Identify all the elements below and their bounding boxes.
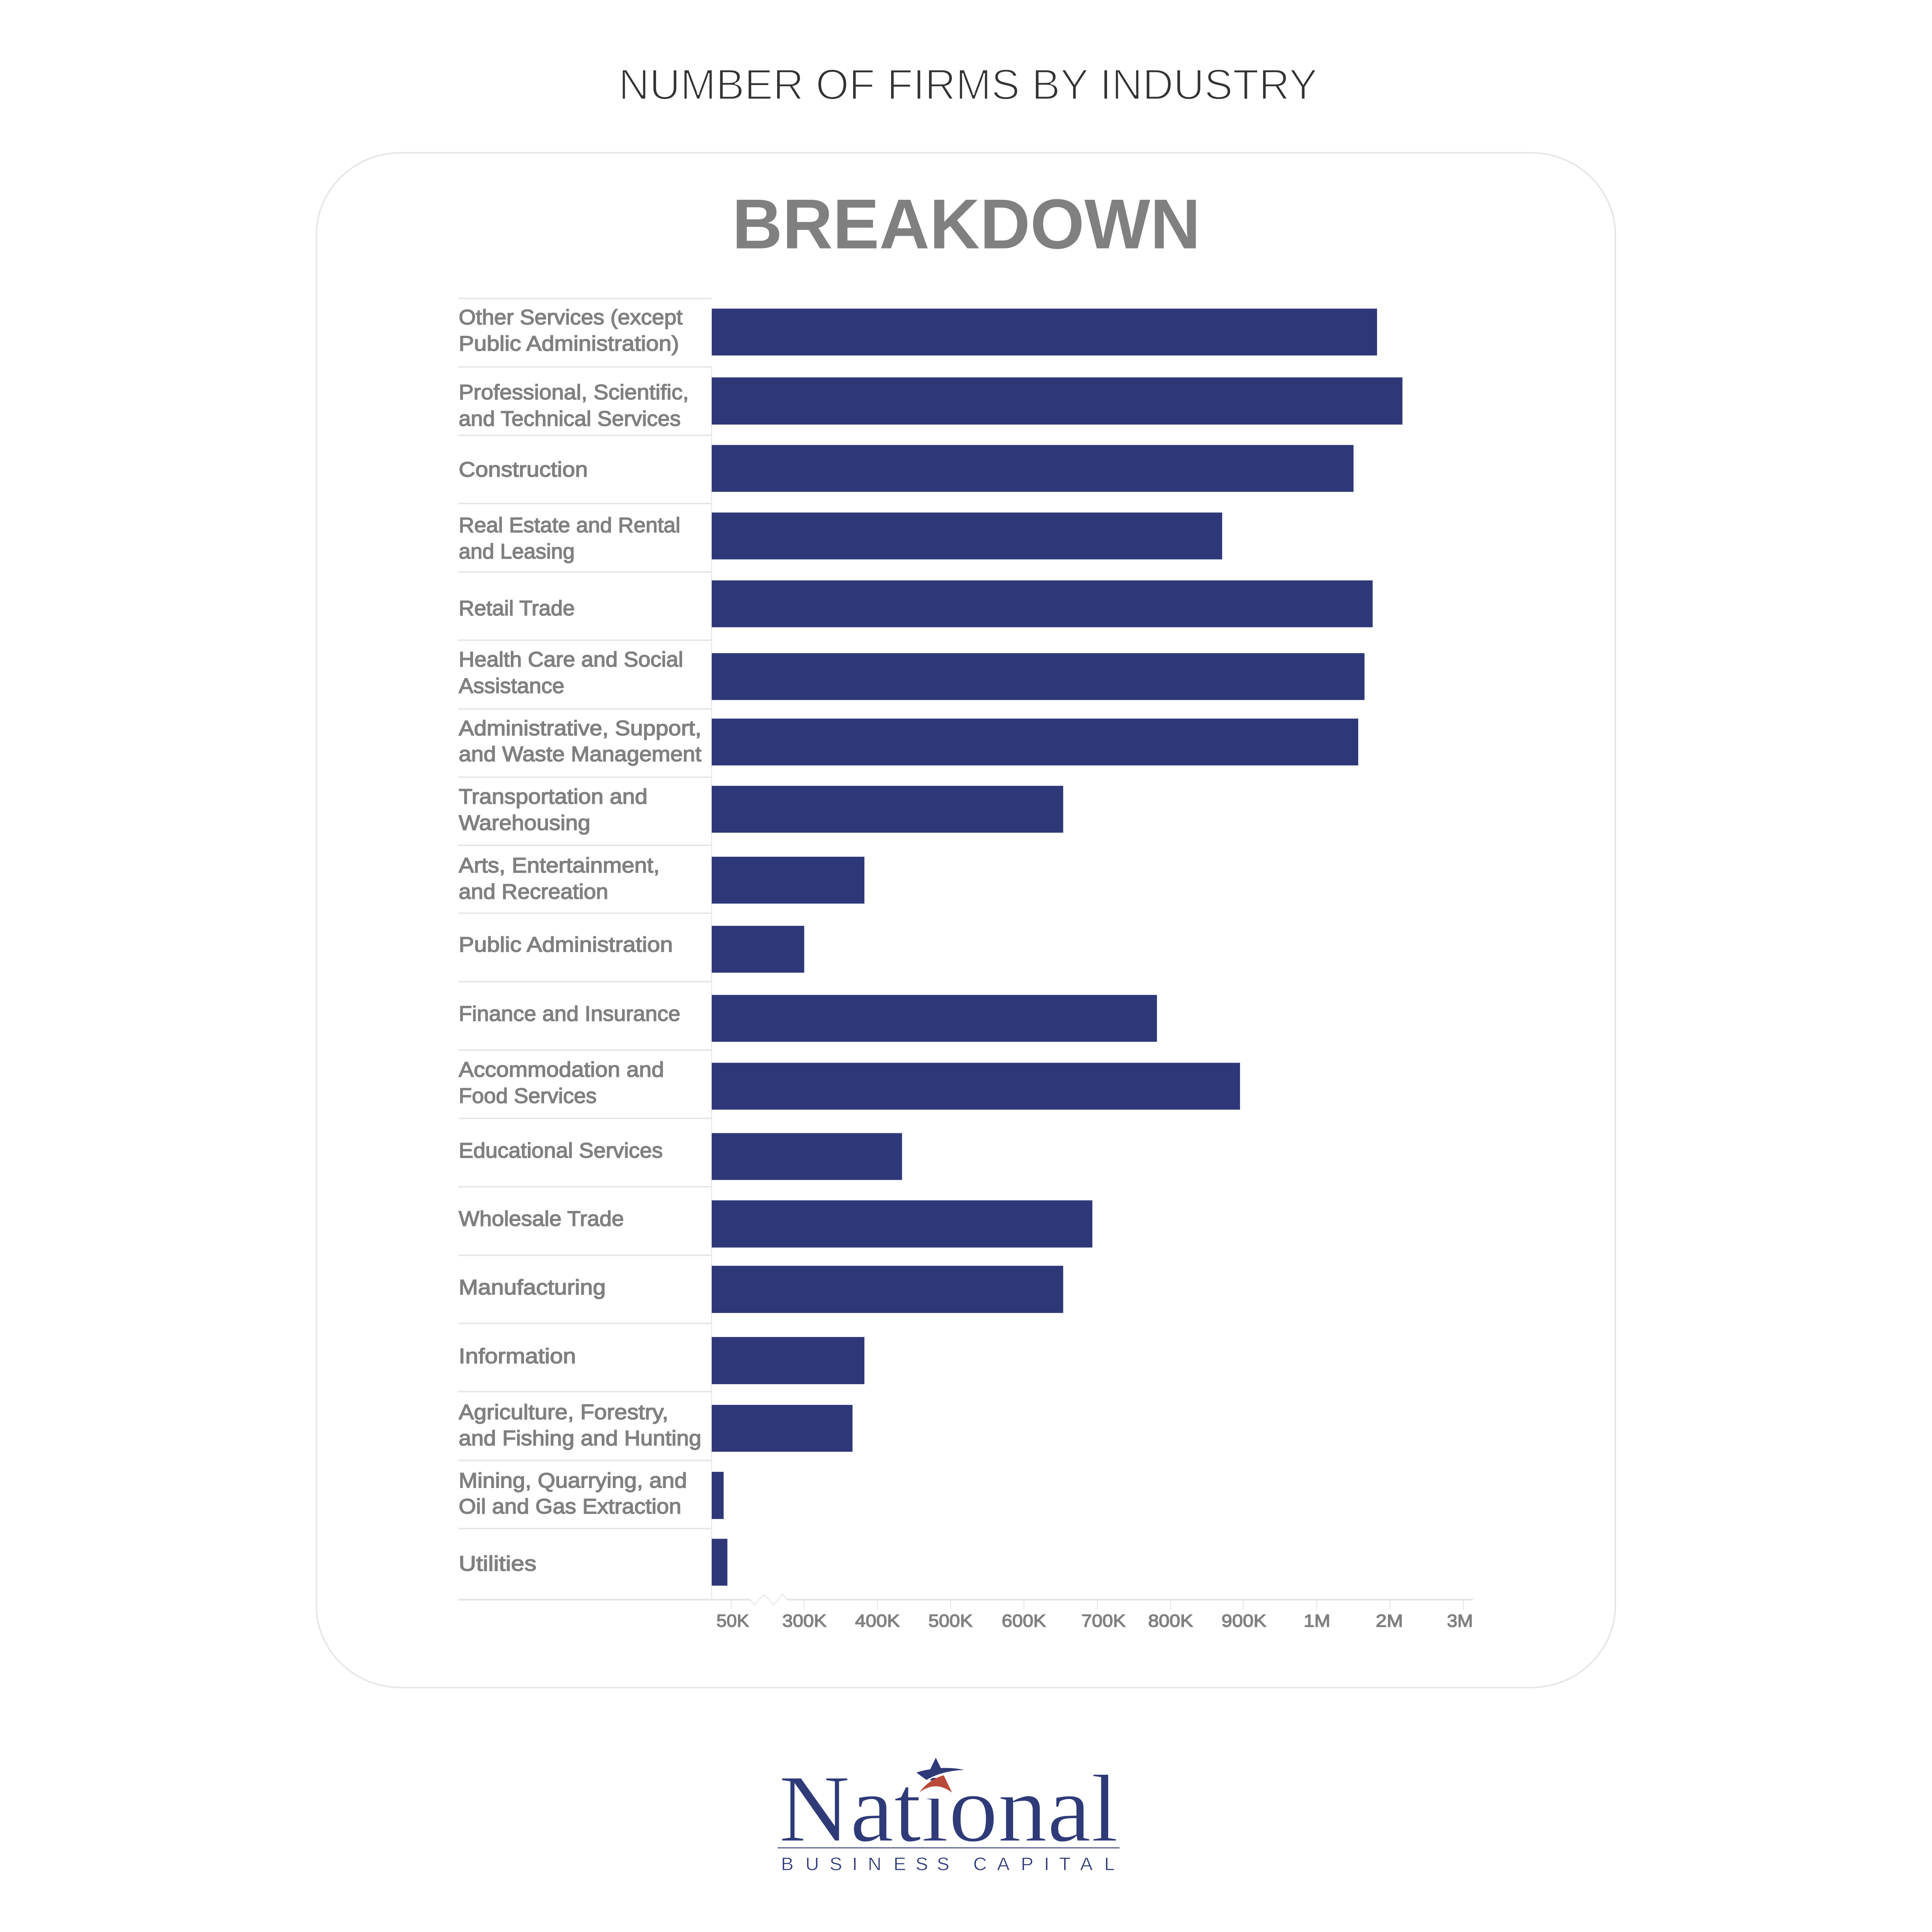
row: Manufacturing	[459, 1266, 1063, 1313]
row: Accommodation: Food Services	[459, 1083, 597, 1107]
x axis: 500K	[929, 1611, 973, 1631]
row: Accommodation: Accommodation and	[459, 1057, 664, 1082]
row: Agriculture: Agriculture, Forestry,	[459, 1400, 668, 1424]
row: Mining	[459, 1468, 724, 1519]
x axis: 600K	[1002, 1611, 1046, 1631]
logo: National Business Capital: BUSINESS CAPITAL	[781, 1854, 1115, 1874]
row: Health Care: Health Care and Social	[459, 647, 683, 671]
row: Public Administration: Public Administration	[459, 932, 673, 956]
x axis: 800K	[1148, 1611, 1193, 1631]
row: Administrative: Administrative, Support,	[459, 716, 701, 740]
row: Transportation	[459, 784, 1063, 835]
row: Public Administration	[459, 926, 804, 973]
row: Health Care: Assistance	[459, 673, 565, 697]
row: Finance and Insurance	[459, 995, 1157, 1042]
panel: breakdown card	[316, 153, 1615, 1688]
row: Professional, Scientific, and Technical Services	[459, 378, 1403, 430]
row: Agriculture: and Fishing and Hunting	[459, 1426, 701, 1450]
icon: star, navy part	[917, 1758, 964, 1780]
x axis: 400K	[855, 1611, 900, 1631]
row: Wholesale Trade: Wholesale Trade	[459, 1206, 624, 1230]
logo: National Business Capital: National	[779, 1755, 1118, 1862]
x axis: 1M	[1304, 1611, 1330, 1631]
row: Real Estate: Real Estate and Rental	[459, 513, 680, 537]
row: Real Estate: and Leasing	[459, 539, 575, 563]
row: Retail Trade: Retail Trade	[459, 596, 575, 620]
row: Wholesale Trade	[459, 1200, 1092, 1248]
row: Administrative: and Waste Management	[459, 742, 702, 766]
row: Other Services	[459, 305, 1377, 355]
row: Construction	[459, 445, 1354, 492]
x axis: 2M	[1376, 1611, 1403, 1631]
row: Administrative	[459, 716, 1358, 766]
x axis: 50K	[716, 1611, 749, 1631]
row: Health Care	[459, 647, 1364, 700]
row: Information	[459, 1337, 864, 1384]
row: Educational Services: Educational Services	[459, 1138, 663, 1162]
bar chart: firms by industry	[458, 298, 1473, 1631]
row: Arts: and Recreation	[459, 879, 608, 903]
row: Educational Services	[459, 1133, 902, 1180]
row: Accommodation	[459, 1057, 1240, 1110]
row: Mining: Mining, Quarrying, and	[459, 1468, 687, 1492]
row: Mining: Oil and Gas Extraction	[459, 1494, 681, 1518]
x axis: 300K	[782, 1611, 827, 1631]
row: Other Services: Other Services (except	[459, 305, 683, 329]
title: NUMBER OF FIRMS BY INDUSTRY	[619, 60, 1318, 109]
row: Manufacturing: Manufacturing	[459, 1275, 606, 1299]
icon: star, red part	[919, 1775, 952, 1793]
row: Professional, Scientific, and Technical Services: Professional, Scientific,	[459, 380, 689, 404]
row: Utilities: Utilities	[459, 1551, 536, 1575]
row: Finance and Insurance: Finance and Insurance	[459, 1002, 680, 1026]
x axis: 900K	[1221, 1611, 1266, 1631]
row: Information: Information	[459, 1344, 576, 1368]
x axis	[458, 1594, 1473, 1631]
row: Transportation: Transportation and	[459, 784, 648, 808]
row: Transportation: Warehousing	[459, 811, 590, 835]
x axis: 700K	[1082, 1611, 1126, 1631]
row: Arts: Arts, Entertainment,	[459, 853, 660, 877]
row: Other Services: Public Administration)	[459, 331, 679, 355]
row: Agriculture	[459, 1400, 852, 1452]
row: Construction: Construction	[459, 457, 588, 481]
x axis: 3M	[1447, 1611, 1473, 1631]
heading: breakdown: BREAKDOWN	[732, 185, 1201, 264]
row: Professional, Scientific, and Technical Services: and Technical Services	[459, 406, 681, 430]
row: Utilities	[459, 1539, 728, 1586]
row: Real Estate	[459, 512, 1222, 563]
row: Arts	[459, 853, 864, 904]
row: Retail Trade	[459, 580, 1372, 627]
